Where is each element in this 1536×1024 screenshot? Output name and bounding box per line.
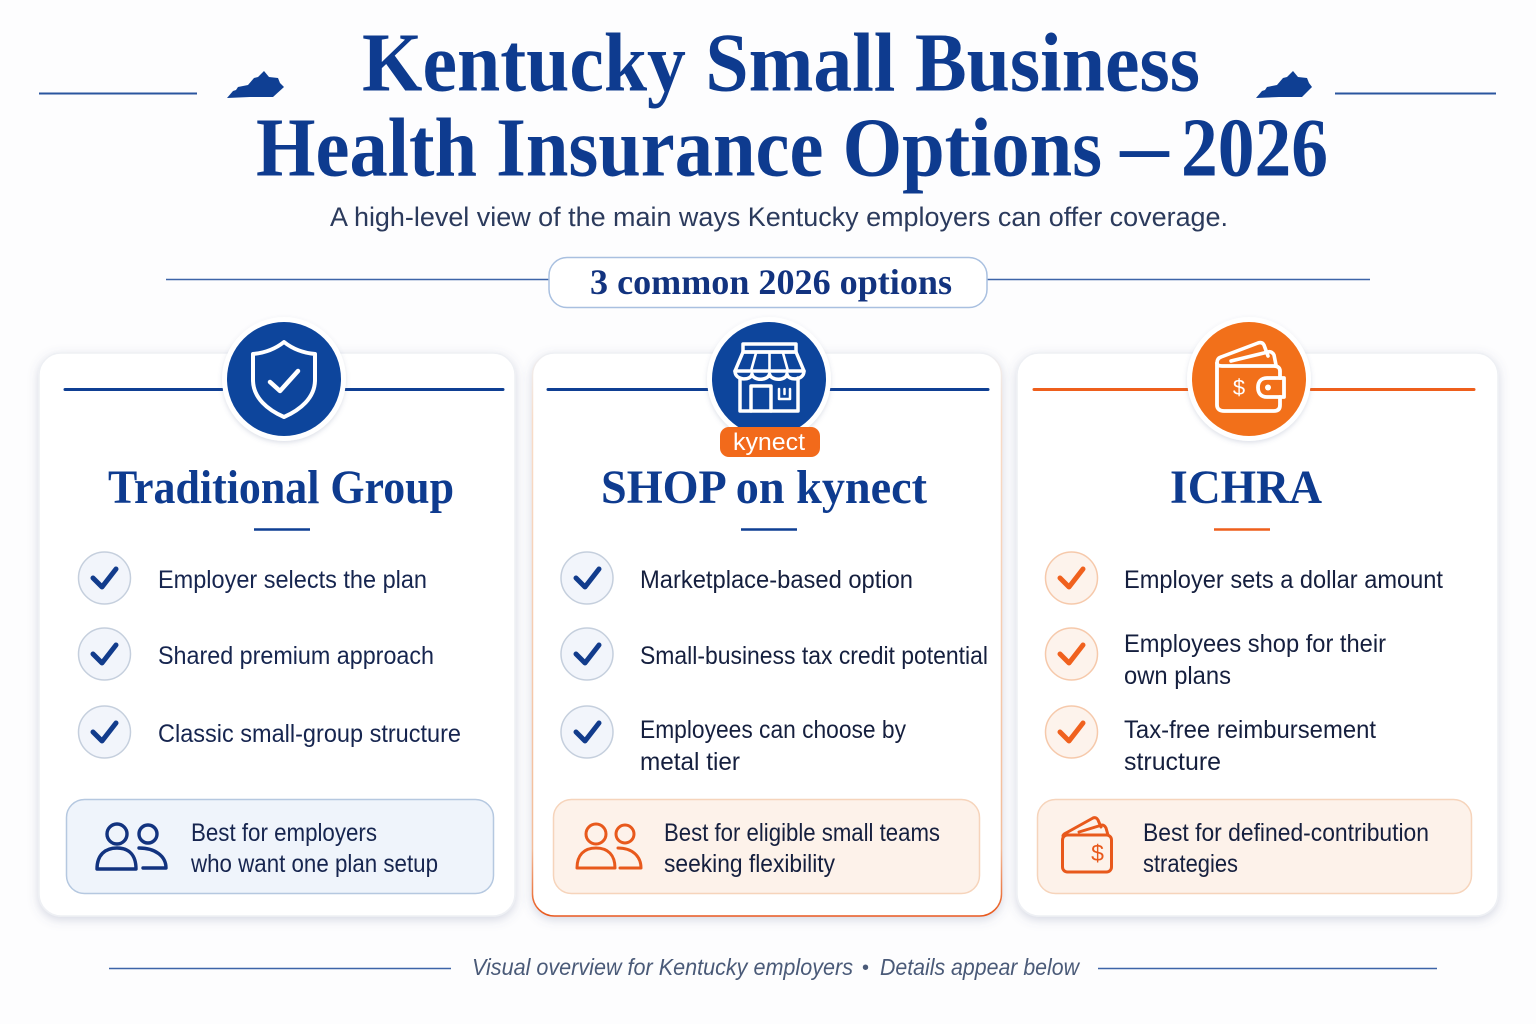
title line two: Health Insurance Options [256, 102, 1102, 194]
item: Small-business tax credit potential: Small-business tax credit potential [640, 642, 988, 670]
callout: best for eligible small teams: Best for eligible small teams [664, 819, 940, 847]
item: Employer sets a dollar amount: Employer sets a dollar amount [1124, 566, 1443, 594]
panel: ICHRA [1017, 317, 1498, 916]
item: Tax-free reimbursement structure [1046, 706, 1376, 776]
title header [39, 16, 1496, 194]
footer note: Visual overview for Kentucky employers [472, 954, 853, 980]
subtitle: A high-level view of the main ways Kentucky employers can offer coverage. [330, 202, 1228, 232]
callout: best for eligible small teams [554, 800, 980, 894]
item: Employees can choose by metal tier: metal tier [640, 748, 740, 776]
item: Shared premium approach [78, 628, 434, 680]
item: Employer selects the plan [78, 552, 427, 604]
item: Employees shop for their own plans: own plans [1124, 662, 1231, 690]
title line two: 2026 [1181, 102, 1328, 194]
icon: small wallet: $ [1091, 840, 1104, 866]
icon: Kentucky right [1256, 71, 1312, 98]
heading: Traditional Group [108, 461, 454, 514]
icon: Kentucky left [227, 71, 284, 98]
badge: kynect [720, 427, 820, 457]
item: Marketplace-based option: Marketplace-based option [640, 566, 913, 594]
icon: wallet: $ [1233, 375, 1245, 400]
heading: ICHRA [1170, 461, 1322, 514]
item: Employees shop for their own plans: Employees shop for their [1124, 630, 1386, 658]
item: Small-business tax credit potential [561, 628, 988, 680]
icon: storefront [707, 317, 831, 441]
item: Tax-free reimbursement structure: Tax-free reimbursement [1124, 716, 1376, 744]
item: Tax-free reimbursement structure: structure [1124, 748, 1221, 776]
footer note [109, 954, 1437, 980]
callout: best for eligible small teams: seeking flexibility [664, 850, 835, 878]
callout: best for defined-contribution: strategies [1143, 850, 1238, 878]
badge: 3 common 2026 options [166, 258, 1370, 308]
item: Marketplace-based option [561, 552, 913, 604]
icon: people [577, 824, 641, 868]
callout: best for defined-contribution: Best for defined-contribution [1143, 819, 1429, 847]
callout: best for defined-contribution [1038, 800, 1472, 894]
item: Classic small-group structure: Classic small-group structure [158, 720, 461, 748]
callout: best for employers [66, 800, 494, 894]
icon: small wallet [1062, 818, 1112, 872]
title line two: — [1119, 100, 1170, 192]
panel: SHOP on kynect [532, 317, 1002, 916]
item: Classic small-group structure [78, 706, 461, 758]
badge: kynect: kynect [733, 429, 805, 456]
item: Employees can choose by metal tier [561, 706, 906, 776]
footer note: • [862, 957, 869, 979]
icon: people [97, 824, 166, 869]
callout: best for employers: who want one plan setup [190, 850, 438, 878]
item: Employees shop for their own plans [1046, 628, 1386, 690]
heading: SHOP on kynect [601, 461, 927, 514]
item: Employer sets a dollar amount [1046, 552, 1443, 604]
title line one: Kentucky Small Business [362, 16, 1200, 110]
footer note: Details appear below [880, 954, 1080, 980]
icon: shield [222, 317, 346, 441]
item: Employees can choose by metal tier: Employees can choose by [640, 716, 906, 744]
panel: Traditional Group [39, 317, 515, 916]
item: Employer selects the plan: Employer selects the plan [158, 566, 427, 594]
badge: 3 common 2026 options: 3 common 2026 options [590, 262, 952, 302]
callout: best for employers: Best for employers [191, 819, 377, 847]
item: Shared premium approach: Shared premium approach [158, 642, 434, 670]
icon: wallet [1187, 317, 1311, 441]
